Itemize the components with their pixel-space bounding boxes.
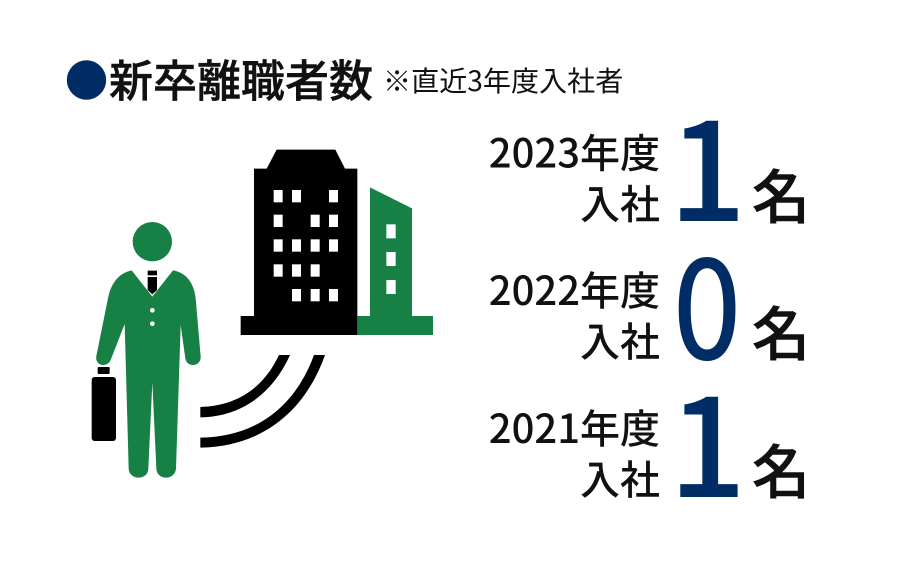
icon: green building	[357, 187, 433, 335]
icon: person	[96, 222, 201, 478]
icon: black building	[241, 150, 357, 335]
row: 2021	[489, 340, 810, 537]
label 2022: 2022年度	[489, 259, 660, 317]
illustration: person walking away from company	[92, 150, 433, 478]
heading bullet	[67, 60, 106, 100]
value 2022: 0	[673, 202, 741, 397]
unit 2022: 名	[752, 288, 810, 372]
icon: briefcase	[92, 367, 116, 441]
title: 新卒離職者数	[109, 46, 373, 110]
value 2023: 1	[669, 64, 746, 261]
unit 2023: 名	[752, 151, 810, 235]
arrow: curved lines	[200, 355, 325, 448]
row: 2022	[489, 202, 810, 397]
subtitle note: ※直近3年度入社者	[383, 59, 623, 100]
label entrants 2022: 入社	[580, 310, 660, 368]
heading	[67, 46, 623, 110]
unit 2021: 名	[752, 426, 810, 510]
value 2021: 1	[669, 340, 746, 537]
label 2023: 2023年度	[489, 122, 660, 180]
row: 2023	[489, 64, 810, 261]
label 2021: 2021年度	[489, 397, 660, 455]
label entrants 2023: 入社	[580, 172, 660, 230]
label entrants 2021: 入社	[580, 448, 660, 506]
